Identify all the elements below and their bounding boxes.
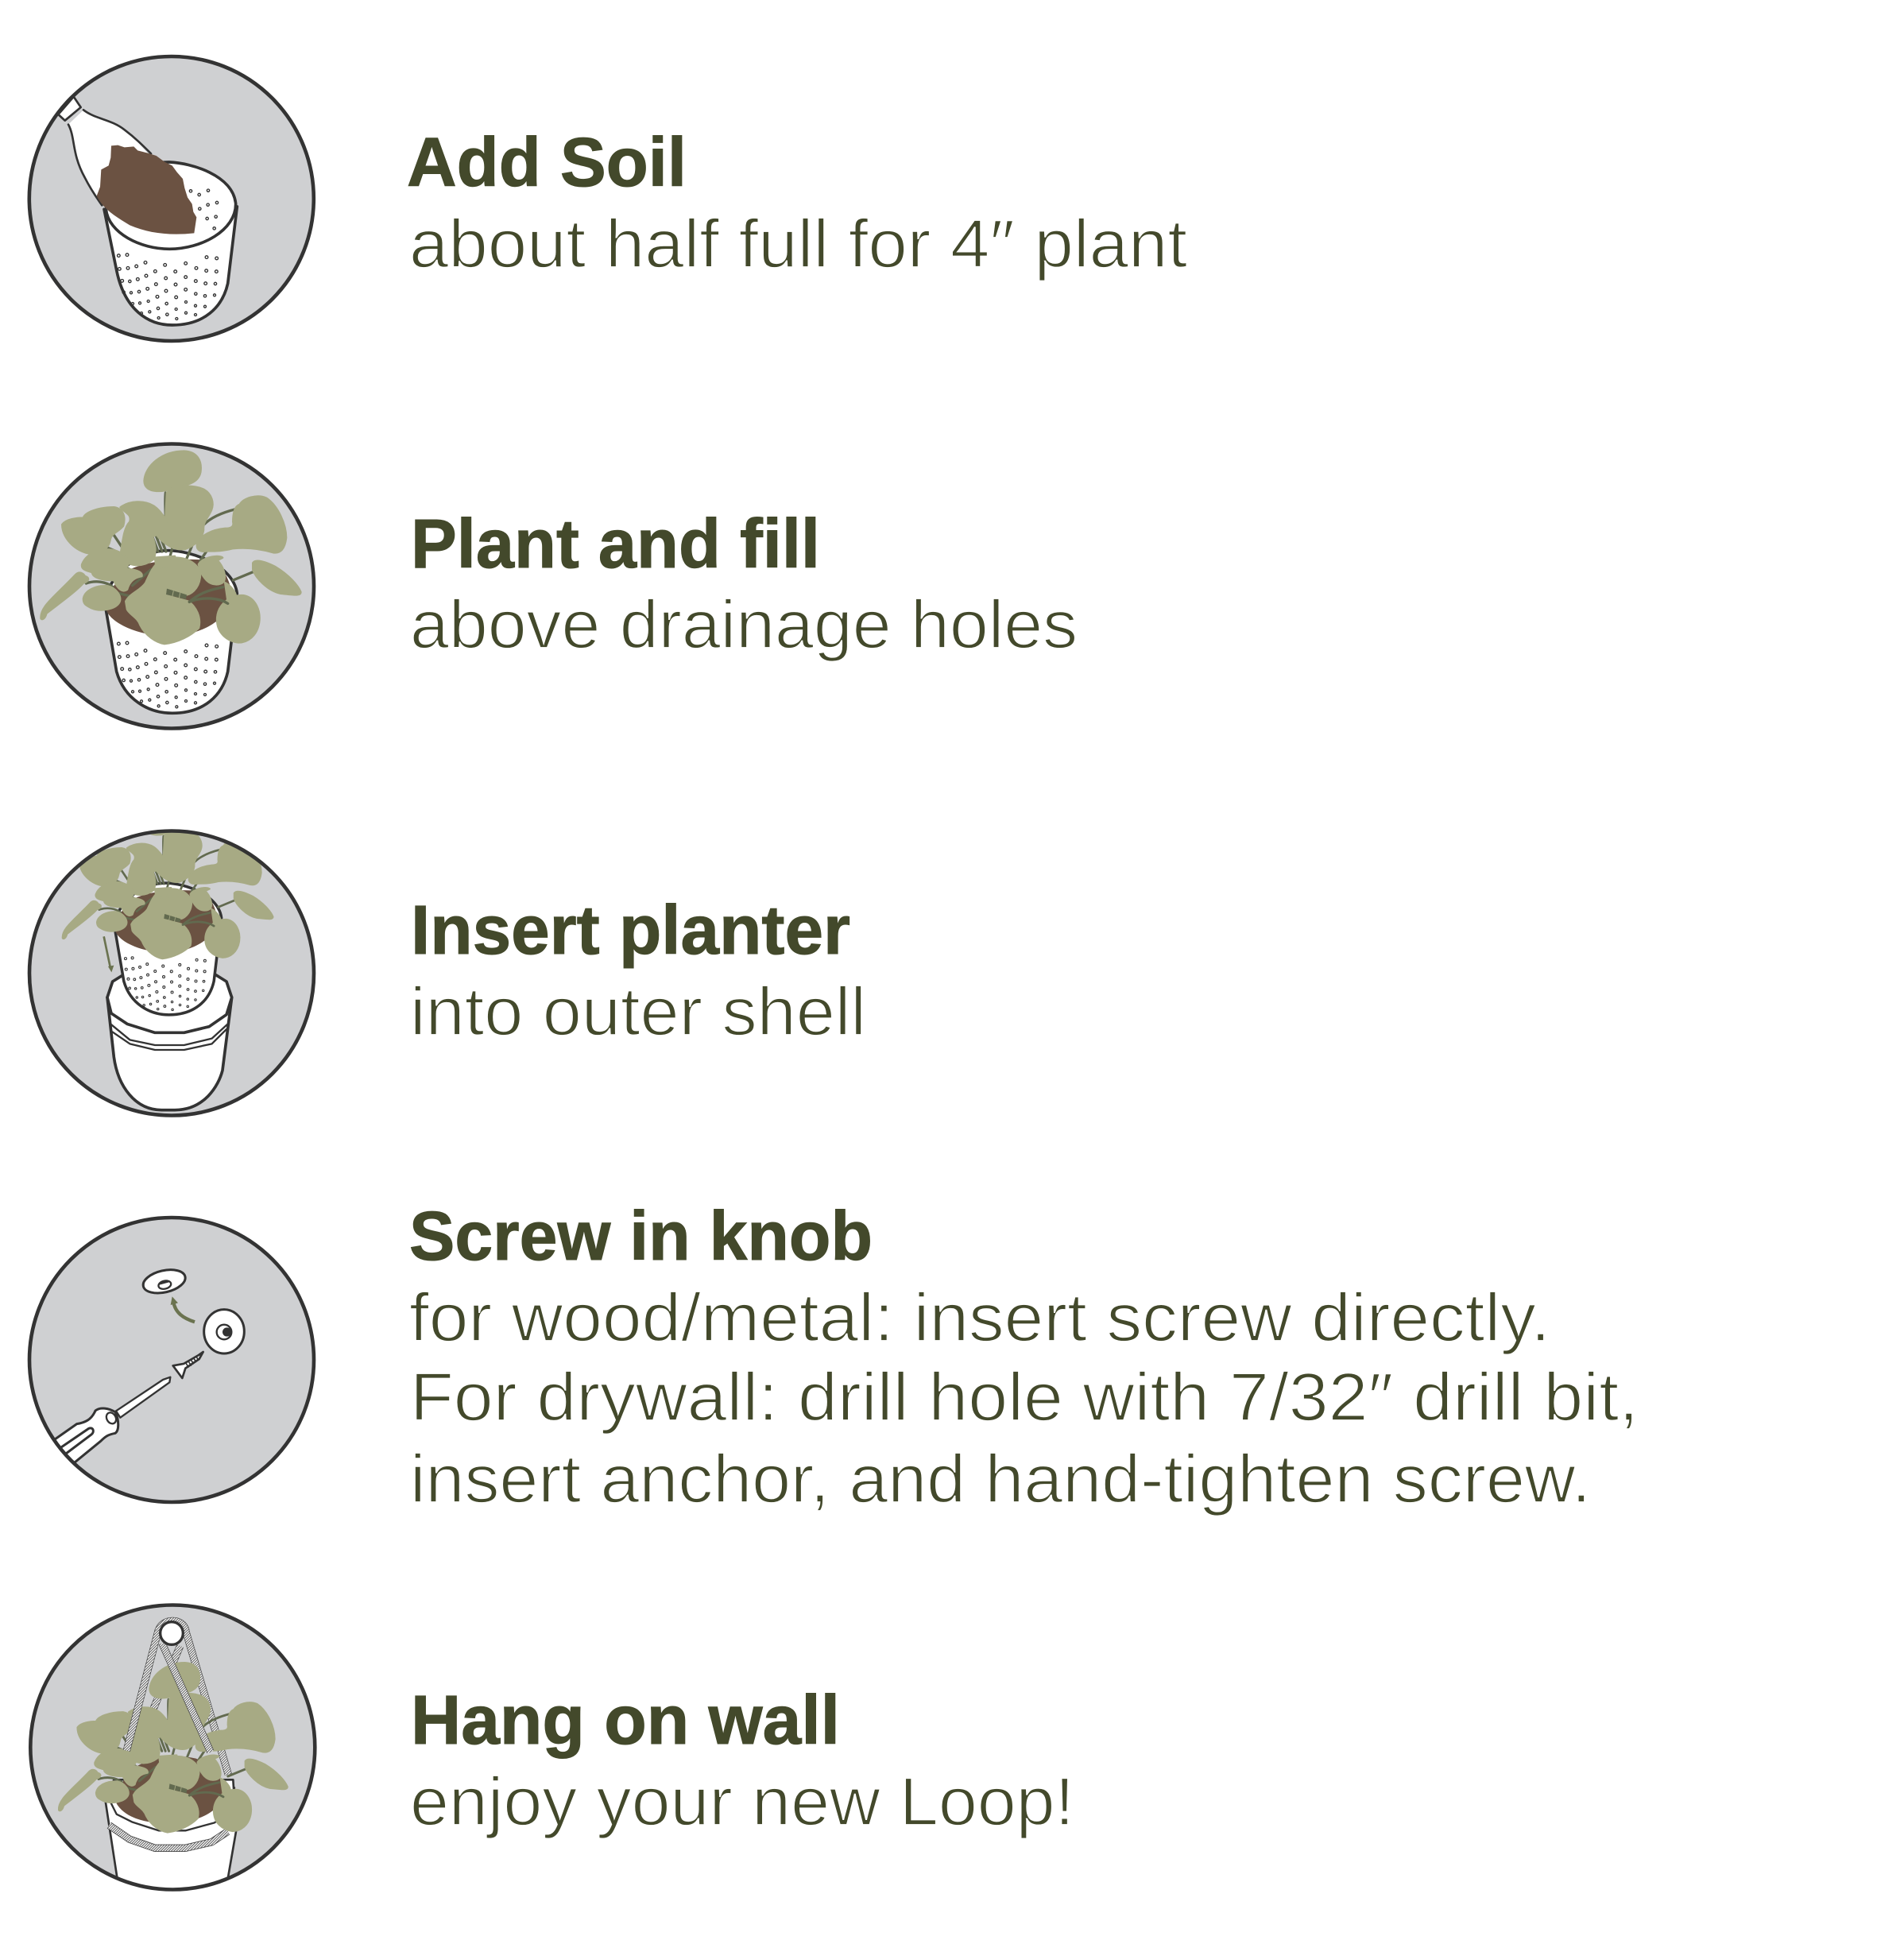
heading: insert planter: Insert planter: [411, 892, 850, 969]
heading: plant and fill: Plant and fill: [411, 505, 820, 583]
step 5: hang on wall: [30, 1605, 1074, 1912]
icon: plant in planter: [29, 443, 314, 728]
soil: [97, 145, 196, 234]
inner rim: [111, 1787, 234, 1830]
scoop: [68, 110, 149, 205]
heading: hang on wall: Hang on wall: [411, 1682, 840, 1759]
planter body: [104, 207, 237, 325]
outer shell: [105, 1779, 237, 1888]
step 4: screw in knob: [29, 1198, 1639, 1517]
back straps: [153, 1630, 228, 1775]
step 2: plant and fill: [29, 443, 1078, 728]
text: about half full: about half full for 4″ plant: [409, 207, 1187, 282]
plant: [59, 1663, 288, 1832]
circle outline: [29, 831, 314, 1116]
text: drywall instructions: For drywall: drill hole with 7/32″ drill bit,: [410, 1360, 1639, 1435]
heading: add soil: Add Soil: [407, 124, 687, 201]
planter holes: [117, 641, 218, 708]
circle outline: [30, 1605, 315, 1890]
soil: [106, 560, 232, 637]
scoop handle: [58, 97, 81, 121]
text: enjoy your new loop: enjoy your new Loop!: [410, 1764, 1074, 1840]
arrow: curved: [171, 1296, 195, 1322]
circle outline: [29, 443, 314, 728]
circle outline: [29, 1218, 314, 1502]
planter: [106, 551, 237, 713]
wall anchor: [141, 1268, 187, 1294]
soil: [117, 1756, 225, 1823]
icon: hanging planter: [32, 1607, 313, 1877]
text: above drainage holes: above drainage holes: [410, 587, 1078, 663]
front straps: [126, 1621, 211, 1752]
hatched band: [109, 1826, 228, 1848]
icon: planter going into outer shell: [31, 833, 312, 1114]
screw: [173, 1352, 203, 1378]
arrow: down: [104, 936, 114, 972]
outer shell body: [107, 997, 232, 1110]
circle outline: [29, 56, 314, 341]
step 3: insert planter: [29, 803, 866, 1116]
text: wood/metal instructions: for wood/metal: insert screw directly.: [409, 1280, 1550, 1356]
planter holes: [117, 254, 218, 319]
shell rim lines: [110, 1024, 228, 1045]
outer shell opening: [107, 975, 232, 1032]
screwdriver: [50, 1377, 170, 1465]
knob: [204, 1310, 244, 1353]
planter rim: [106, 162, 236, 249]
plant: [41, 451, 300, 644]
step 1: add soil: [29, 56, 1187, 341]
icon: screwdriver, screw, knob and anchor: [29, 1218, 314, 1502]
inner planter: [62, 833, 273, 1017]
knob: [161, 1622, 183, 1644]
heading: screw in knob: Screw in knob: [409, 1198, 873, 1275]
text: into outer shell: into outer shell: [410, 974, 866, 1050]
icon: soil being scooped into planter: [29, 56, 314, 341]
text: anchor instructions: insert anchor, and hand-tighten screw.: [410, 1442, 1591, 1517]
